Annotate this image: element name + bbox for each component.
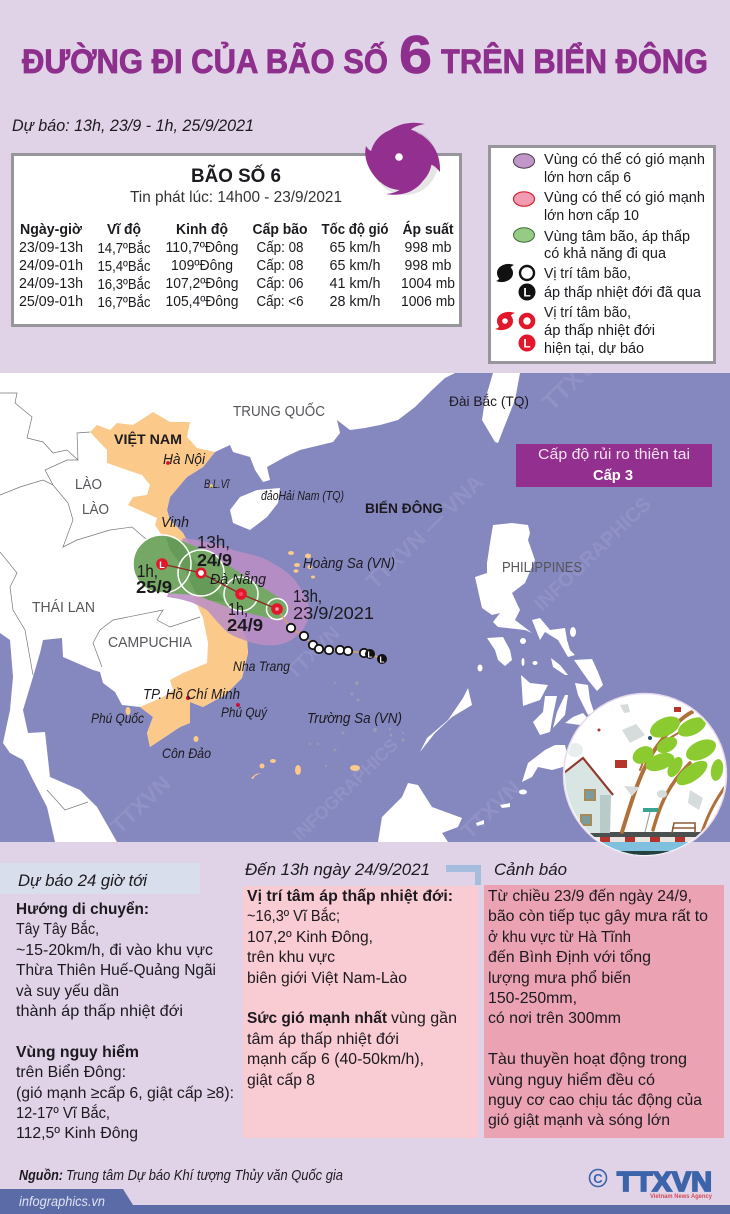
watermarks: TTXVN — [456, 776, 525, 844]
place labels: Trường Sa (VN) — [307, 710, 402, 727]
country borders — [0, 393, 200, 810]
table data rows: 105,4ºĐông — [166, 294, 238, 310]
panel: warning — [484, 861, 724, 1138]
callout: disaster risk level — [516, 444, 712, 487]
table header row: Kinh độ — [176, 222, 228, 238]
past positions: L — [380, 656, 385, 664]
table data rows: 107,2ºĐông — [166, 276, 238, 292]
legend labels: lớn hơn cấp 6 — [544, 169, 631, 186]
warning text: có nơi trên 300mm — [488, 1010, 621, 1027]
position text: 107,2º Kinh Đông, — [247, 929, 373, 946]
past positions — [287, 624, 387, 664]
country and sea labels: LÀO — [82, 501, 109, 518]
city dots — [166, 461, 240, 707]
wind strength text: mạnh cấp 6 (40-50km/h), — [247, 1051, 424, 1068]
watermarks: TTXVN — [282, 622, 345, 684]
danger zone text: 12-17º Vĩ Bắc, — [16, 1103, 110, 1122]
Spratly small islets — [309, 681, 404, 767]
callout: disaster risk level: Cấp 3 — [593, 467, 633, 484]
forecast position 13h 24/9 — [197, 569, 205, 577]
watermarks: INFOGRAPHICS — [289, 735, 402, 845]
table data rows: Cấp: 06 — [256, 276, 304, 292]
legend labels: áp thấp nhiệt đới đã qua — [544, 284, 702, 301]
illustration: house and trees in storm — [560, 694, 728, 858]
storm centre zone — [133, 535, 288, 620]
movement direction text: Thừa Thiên Huế-Quảng Ngãi — [16, 962, 216, 979]
legend icons: past positions — [496, 264, 536, 300]
legend icons: past positions: L — [523, 286, 531, 300]
place labels: Phú Quốc — [91, 710, 144, 726]
place labels: đảoHải Nam (TQ) — [261, 489, 344, 503]
legend labels: lớn hơn cấp 10 — [544, 207, 639, 224]
storm time labels: 25/9 — [136, 577, 172, 597]
country and sea labels: VIỆT NAM — [114, 430, 182, 447]
current position 13h 23/9 — [271, 603, 283, 615]
country and sea labels: CAMPUCHIA — [108, 634, 192, 651]
table data rows: 24/09-13h — [19, 276, 83, 292]
table header row: Cấp bão — [252, 222, 308, 238]
place labels: Hoàng Sa (VN) — [303, 555, 395, 572]
icon: storm spiral — [365, 123, 440, 195]
legend labels: Vị trí tâm bão, — [544, 304, 631, 321]
warning text: vùng nguy hiểm đều có — [488, 1071, 655, 1089]
country and sea labels: THÁI LAN — [32, 599, 95, 616]
warning text: bão còn tiếp tục gây mưa rất to — [488, 908, 708, 925]
legend labels: Vùng có thể có gió mạnh — [544, 151, 705, 168]
Hainan island — [230, 488, 280, 530]
logo: TTXVN — [590, 1166, 713, 1200]
panel: position by 13h 24/9/2021 — [243, 861, 481, 1138]
panel: warning: Cảnh báo — [494, 861, 567, 879]
table heading: BÃO SỐ 6 — [191, 165, 281, 187]
place labels: Hà Nội — [163, 452, 206, 468]
source credit: Trung tâm Dự báo Khí tượng Thủy văn Quốc gia — [66, 1168, 343, 1184]
storm time labels: 23/9/2021 — [293, 603, 374, 623]
Vietnamese islands — [126, 551, 360, 779]
warning text: nguy cơ cao chịu tác động của — [488, 1092, 702, 1109]
position text: biên giới Việt Nam-Lào — [247, 970, 407, 987]
legend labels: có khả năng đi qua — [544, 245, 667, 262]
danger zone text — [16, 1043, 234, 1142]
table header row: Ngày-giờ — [20, 222, 83, 238]
legend labels: Vùng tâm bão, áp thấp — [544, 228, 690, 245]
legend labels: Vùng có thể có gió mạnh — [544, 189, 705, 206]
place labels: TP. Hồ Chí Minh — [143, 686, 240, 703]
callout: disaster risk level: Cấp độ rủi ro thiên tai — [538, 446, 690, 463]
country and sea labels: TRUNG QUỐC — [233, 402, 325, 420]
danger zone text: trên Biển Đông: — [16, 1063, 126, 1081]
table header row: Tốc độ gió — [322, 222, 389, 238]
forecast position 1h 25/9: L — [159, 560, 165, 570]
panel: forecast next 24 hours: Dự báo 24 giờ tới — [18, 872, 148, 890]
storm time labels: 1h, — [228, 599, 248, 619]
panel: forecast next 24 hours — [0, 863, 234, 1142]
table heading — [130, 165, 342, 206]
table data rows: Cấp: 08 — [256, 240, 304, 256]
Borneo island — [378, 783, 510, 842]
danger zone text: Vùng nguy hiểm — [16, 1043, 139, 1061]
warning text: Tàu thuyền hoạt động trong — [488, 1051, 687, 1068]
table header row: Vĩ độ — [107, 222, 141, 238]
position text: Vị trí tâm áp thấp nhiệt đới: — [247, 888, 453, 905]
country and sea labels: Đài Bắc (TQ) — [449, 393, 529, 409]
country and sea labels: PHILIPPINES — [502, 560, 582, 576]
source credit: Nguồn: — [19, 1168, 63, 1184]
country and sea labels: LÀO — [75, 476, 102, 493]
warning text: Từ chiều 23/9 đến ngày 24/9, — [488, 888, 692, 905]
danger zone text: 112,5º Kinh Đông — [16, 1125, 138, 1142]
table data rows: 65 km/h — [330, 258, 380, 274]
footer bar: infographics.vn — [19, 1193, 105, 1209]
watermarks: INFOGRAPHICS — [530, 493, 656, 616]
place labels: Vinh — [161, 514, 189, 531]
table data rows: 1004 mb — [401, 276, 455, 292]
danger zone text: (gió mạnh ≥cấp 6, giật cấp ≥8): — [16, 1085, 234, 1102]
legend swatch: storm centre zone — [514, 228, 534, 242]
warning text: lượng mưa phổ biến — [488, 969, 631, 987]
position text: ~16,3º Vĩ Bắc; — [247, 906, 340, 925]
wind strength text: Sức gió mạnh nhất — [247, 1010, 388, 1027]
wind strength text: giật cấp 8 — [247, 1072, 315, 1089]
Vietnam land — [90, 412, 248, 747]
logo: TTXVN: C — [593, 1171, 603, 1186]
table data rows: 15,4ºBắc — [98, 258, 150, 275]
legend labels: Vị trí tâm bão, — [544, 265, 631, 282]
place labels — [91, 452, 402, 761]
panel: position by 13h 24/9/2021: Đến 13h ngày 24/9/2021 — [245, 861, 430, 879]
movement direction text — [16, 900, 216, 1020]
past positions: L — [368, 650, 373, 660]
table heading: Tin phát lúc: 14h00 - 23/9/2021 — [130, 189, 342, 206]
place labels: Nha Trang — [233, 658, 290, 674]
country and sea labels — [32, 393, 582, 651]
Philippines islands — [420, 523, 603, 794]
decorative bracket — [446, 865, 481, 885]
table data rows — [19, 240, 455, 311]
table data rows: 998 mb — [404, 258, 452, 274]
table data rows: Cấp: 08 — [256, 258, 304, 274]
watermarks — [106, 342, 656, 845]
position text — [247, 888, 453, 987]
table header row — [20, 221, 454, 238]
storm time labels: 1h, — [137, 561, 158, 581]
logo: TTXVN: TTXVN — [617, 1166, 712, 1197]
table data rows: 24/09-01h — [19, 258, 83, 274]
panel: storm data table — [12, 154, 460, 326]
movement direction text: ~15-20km/h, đi vào khu vực — [16, 942, 213, 959]
logo: TTXVN: Vietnam News Agency — [650, 1194, 713, 1200]
position text: trên khu vực — [247, 949, 335, 966]
storm time labels: 13h, — [293, 586, 322, 606]
title: 6 — [399, 25, 432, 85]
warning text: ở khu vực từ Hà Tĩnh — [488, 929, 631, 946]
warning text: gió giật mạnh và sóng lớn — [488, 1112, 670, 1129]
table data rows: 110,7ºĐông — [166, 240, 238, 256]
place labels: Côn Đảo — [162, 745, 211, 761]
storm time labels: 24/9 — [197, 550, 232, 570]
panel: legend — [490, 146, 714, 362]
warning text — [488, 888, 708, 1129]
watermarks: TTXVN — [106, 771, 175, 839]
place labels: B.L.Vĩ — [204, 479, 231, 491]
table data rows: 65 km/h — [330, 240, 380, 256]
legend icons: current and forecast positions: L — [523, 336, 531, 350]
wind zone above level 6 — [167, 538, 310, 645]
wind strength text — [247, 1010, 457, 1089]
table data rows: 14,7ºBắc — [98, 240, 150, 257]
warning text: 150-250mm, — [488, 990, 577, 1007]
table data rows: 25/09-01h — [19, 294, 83, 310]
table data rows: 28 km/h — [330, 294, 380, 310]
table data rows: 1006 mb — [401, 294, 455, 310]
map — [0, 342, 730, 845]
title: ĐƯỜNG ĐI CỦA BÃO SỐ — [22, 42, 388, 81]
title: TRÊN BIỂN ĐÔNG — [441, 42, 708, 81]
table data rows: 998 mb — [404, 240, 452, 256]
mainland Asia landmass — [0, 373, 455, 842]
movement direction text: Hướng di chuyển: — [16, 900, 149, 918]
movement direction text: Tây Tây Bắc, — [16, 919, 99, 938]
Taiwan island — [482, 373, 520, 443]
legend icons: current and forecast positions — [495, 312, 536, 352]
legend labels — [544, 151, 705, 357]
wind strength text: vùng gần — [391, 1010, 457, 1027]
past track line — [280, 613, 378, 658]
table data rows: 16,3ºBắc — [98, 276, 150, 293]
country and sea labels: BIỂN ĐÔNG — [365, 499, 443, 516]
forecast circles — [133, 535, 288, 620]
legend labels: hiện tại, dự báo — [544, 340, 644, 357]
movement direction text: thành áp thấp nhiệt đới — [16, 1003, 183, 1020]
watermarks: TTXVN — [537, 342, 613, 416]
watermarks: TTXVN — VNA — [361, 469, 488, 594]
legend swatch: wind above level 10 — [514, 192, 534, 206]
table header row: Áp suất — [402, 221, 454, 238]
forecast position 1h 24/9 — [235, 588, 247, 600]
forecast position 1h 25/9 — [156, 558, 168, 570]
forecast period subtitle: Dự báo: 13h, 23/9 - 1h, 25/9/2021 — [12, 117, 254, 135]
warning text: đến Bình Định với tổng — [488, 948, 651, 966]
forecast track line — [168, 564, 272, 608]
storm time labels: 13h, — [197, 532, 230, 552]
legend swatch: wind above level 6 — [514, 154, 534, 168]
table data rows: 23/09-13h — [19, 240, 83, 256]
footer bar — [0, 1189, 730, 1214]
storm time labels: 24/9 — [227, 615, 263, 635]
table data rows: 16,7ºBắc — [98, 294, 150, 311]
table data rows: 109ºĐông — [171, 258, 233, 274]
place labels: Phú Quý — [221, 704, 268, 720]
table data rows: 41 km/h — [330, 276, 380, 292]
movement direction text: và suy yếu dần — [16, 983, 119, 1000]
wind strength text: tâm áp thấp nhiệt đới — [247, 1031, 399, 1048]
place labels: Đà Nẵng — [210, 571, 267, 588]
legend labels: áp thấp nhiệt đới — [544, 322, 655, 339]
storm time labels — [136, 532, 374, 635]
title — [22, 25, 708, 85]
table data rows: Cấp: <6 — [256, 294, 304, 310]
